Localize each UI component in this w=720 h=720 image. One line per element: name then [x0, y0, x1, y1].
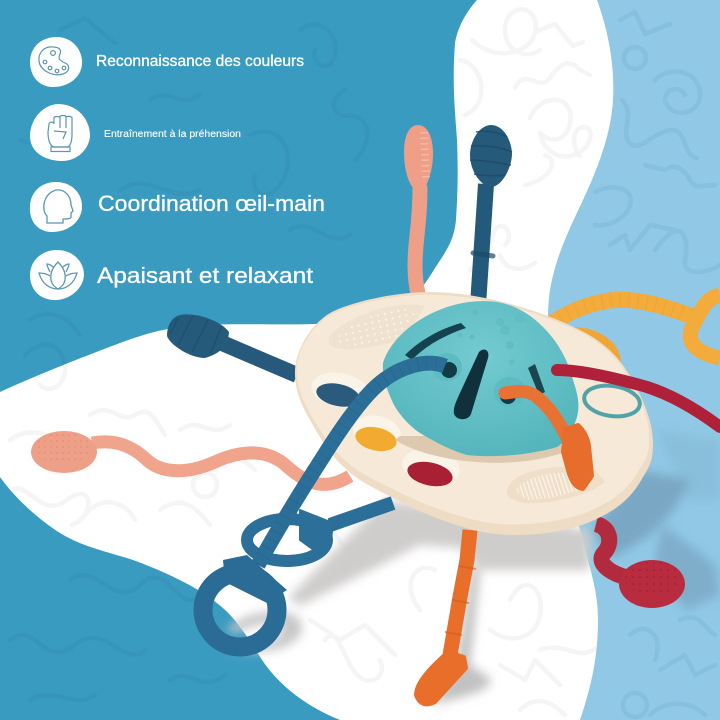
feature: colour recognition: [30, 37, 304, 87]
tentacle: upright peach teether: [404, 125, 433, 322]
tentacle: yellow ring handle: [545, 295, 720, 358]
hole rims on dome: [494, 377, 526, 407]
tentacle: front orange pull: [505, 391, 592, 489]
tentacle: front blue ring pull: [203, 363, 445, 647]
label: soothing and relaxing: Apaisant et relaxant: [97, 263, 313, 288]
feature: soothing and relaxing: [30, 250, 313, 300]
hole: navy: [308, 368, 372, 412]
icon: fist: [30, 104, 90, 161]
label: hand-eye coordination: Coordination œil-main: [98, 191, 325, 216]
icon: lotus: [30, 250, 84, 300]
feature: hand-eye coordination: [30, 182, 325, 232]
disc base: [295, 292, 653, 535]
tentacle: upright navy teether: [470, 125, 512, 305]
shadow: orange teether: [432, 565, 490, 705]
tentacle: bottom crimson teether: [596, 524, 685, 608]
hole: crimson: [399, 444, 463, 490]
back ring yellow: [572, 332, 616, 365]
tentacle: left navy teether: [167, 314, 297, 375]
background: light blue panel: [540, 0, 720, 720]
tentacle: bottom orange teether: [416, 530, 476, 704]
dome: [383, 301, 578, 463]
shadow: under disc on white: [288, 500, 590, 606]
shadow: disc on light blue: [592, 470, 690, 558]
ring: teal on disc: [582, 382, 642, 420]
label: grip training: Entraînement à la préhension: [104, 129, 241, 140]
dome dots: [458, 309, 525, 365]
texture pad: ridges: [507, 467, 605, 503]
shadow: ring: [226, 611, 302, 652]
tentacle: back navy ring: [247, 503, 393, 561]
tentacle: crimson strand: [557, 370, 720, 427]
icon: head profile: [30, 182, 82, 232]
feature: grip training: [30, 104, 241, 161]
toy shadows: [226, 430, 720, 705]
background squiggle pattern on light blue: [595, 12, 720, 717]
hole: yellow: [350, 411, 404, 453]
icon: palette: [30, 37, 82, 87]
tentacle: peach squiggle teether: [31, 431, 350, 484]
texture pad: dots: [328, 305, 425, 349]
feature list: [30, 37, 325, 300]
toy: [31, 125, 720, 704]
dome slots: [454, 350, 488, 419]
label: colour recognition: Reconnaissance des couleurs: [96, 53, 304, 70]
